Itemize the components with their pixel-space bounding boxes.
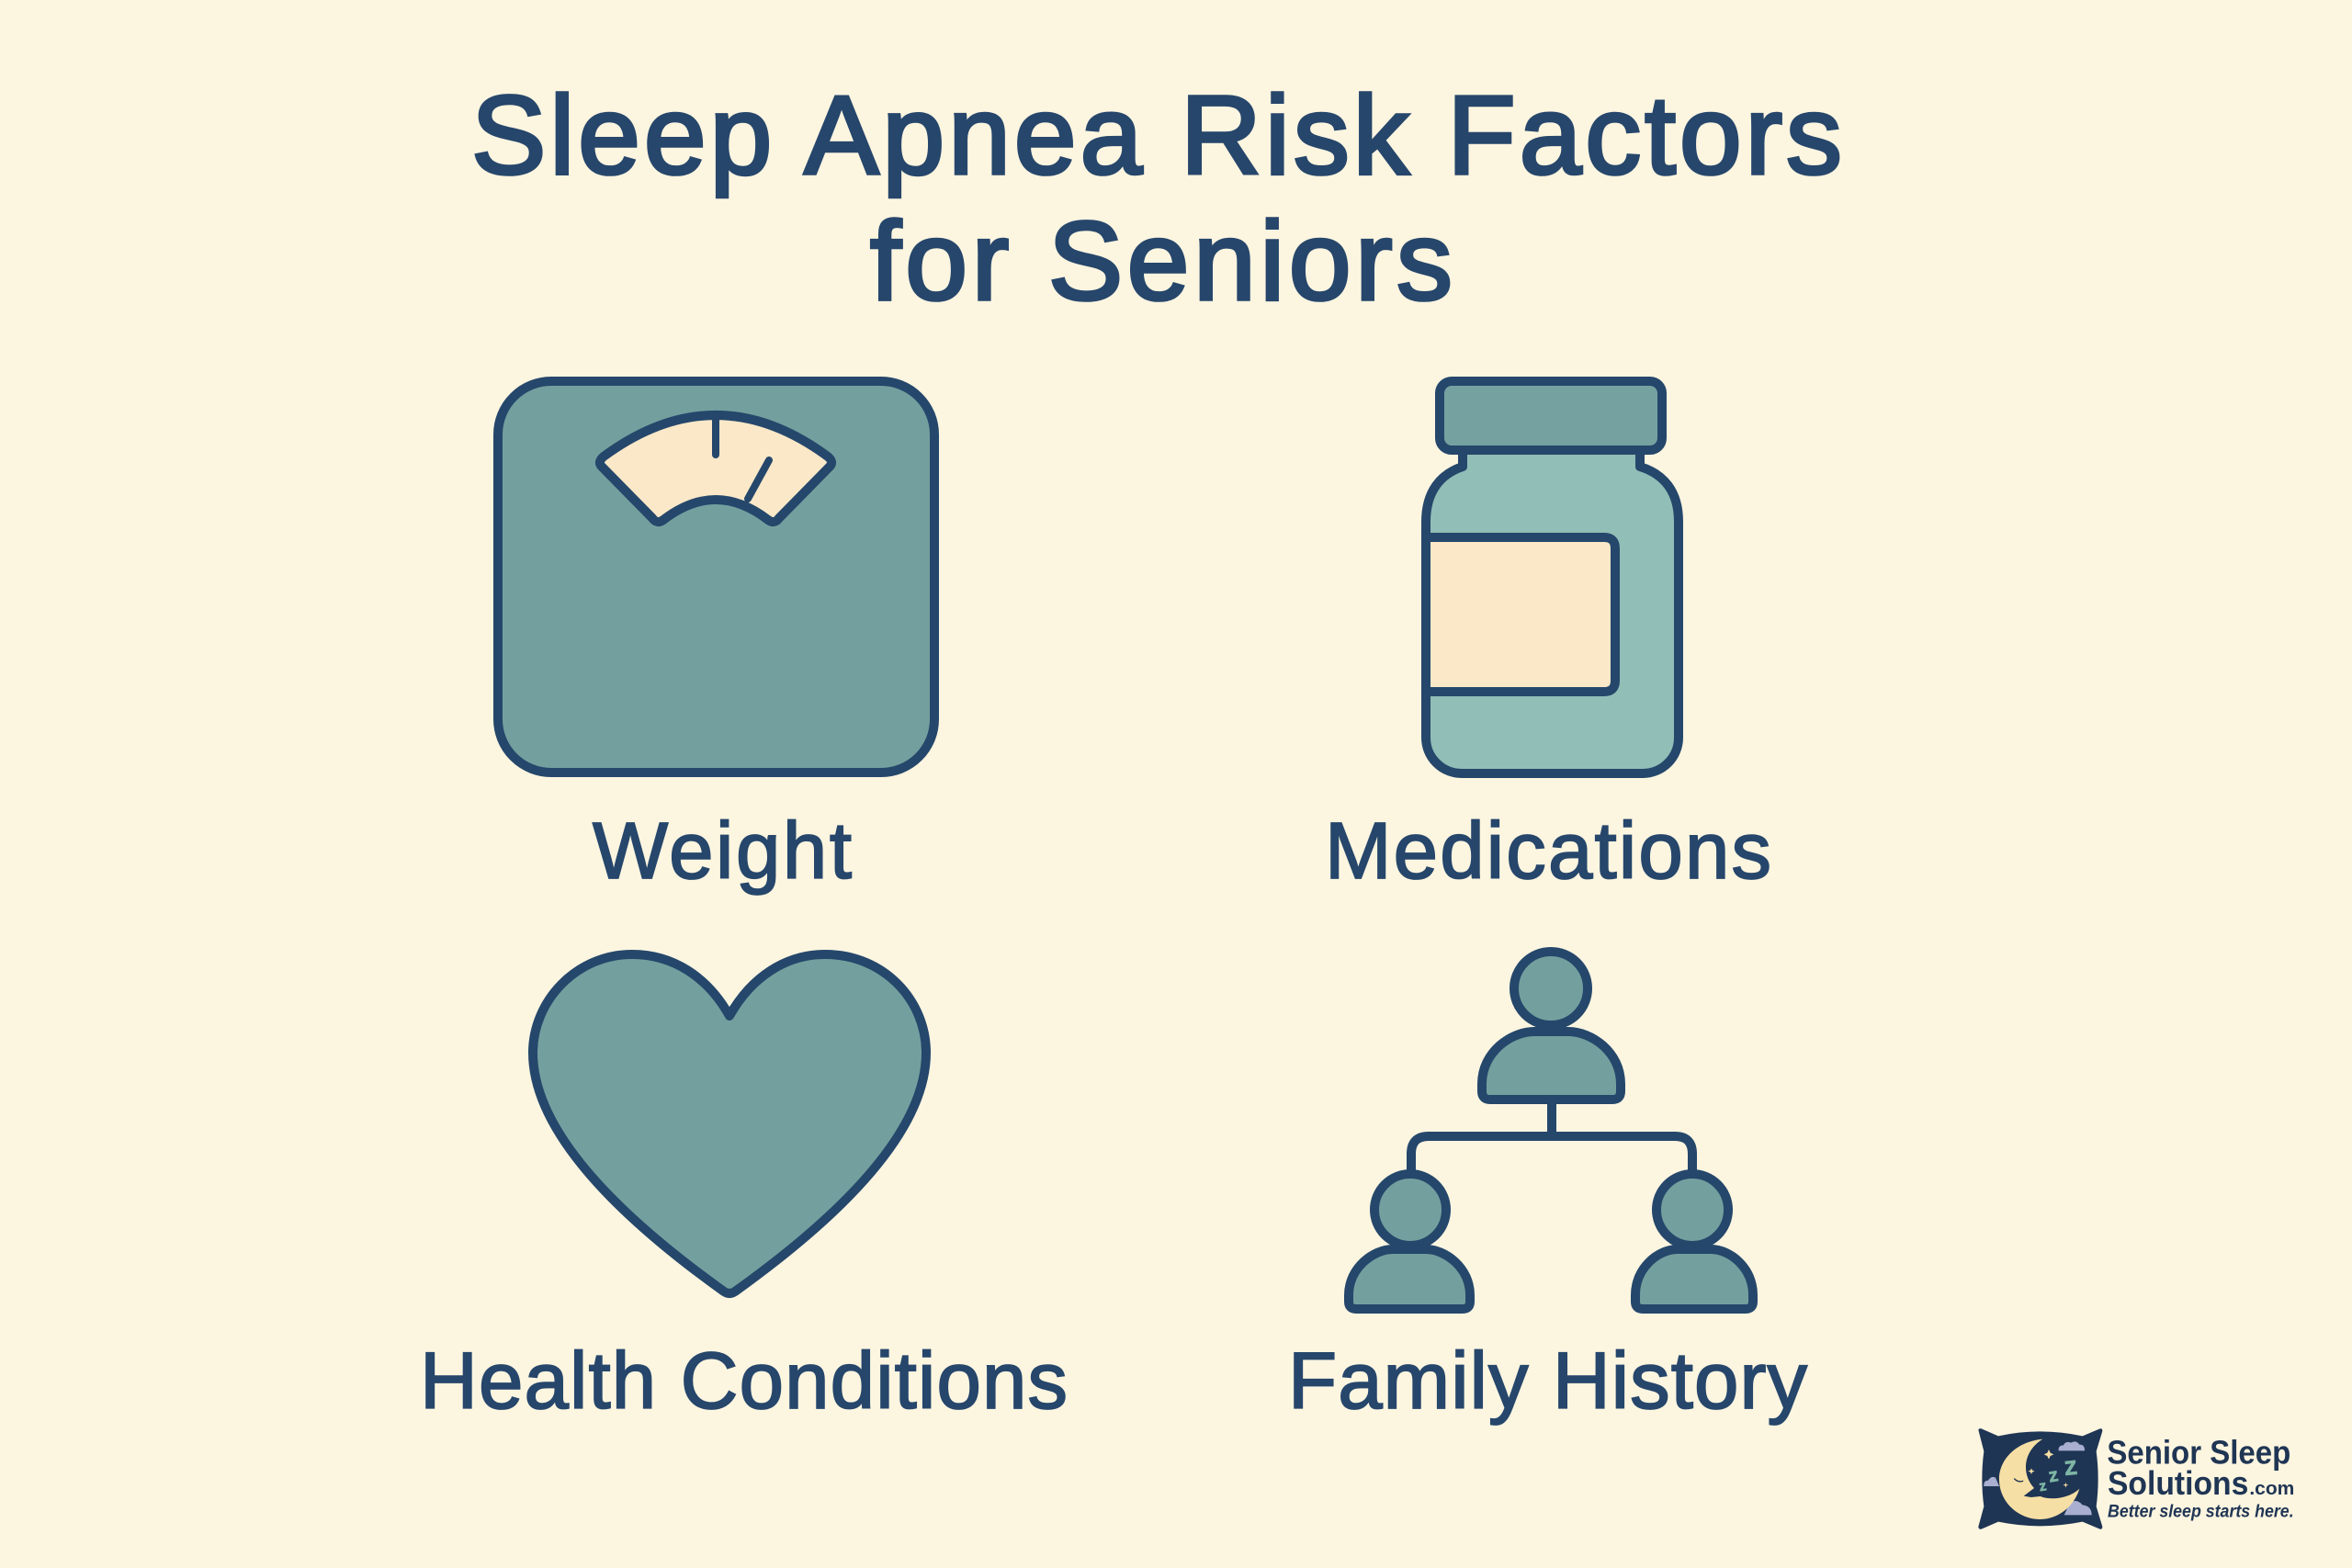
label: weight: Weight bbox=[593, 807, 852, 896]
label: health conditions: Health Conditions bbox=[420, 1337, 1068, 1426]
label: medications: Medications bbox=[1325, 807, 1771, 896]
icon: sleep letters: Z bbox=[2039, 1482, 2047, 1494]
icon: family tree bbox=[1349, 952, 1753, 1309]
panel: family history bbox=[1288, 952, 1808, 1426]
icon: stars bbox=[2028, 1450, 2068, 1488]
logo wordmark: .com bbox=[2249, 1478, 2294, 1499]
icon: closed eye bbox=[2015, 1479, 2023, 1482]
icon: crescent moon bbox=[1999, 1439, 2079, 1519]
logo wordmark: Senior Sleep bbox=[2107, 1433, 2290, 1471]
label: family history: Family History bbox=[1288, 1337, 1808, 1426]
icon: bathroom scale bbox=[498, 381, 934, 773]
logo wordmark: Better sleep starts here. bbox=[2108, 1503, 2294, 1522]
logo: Senior Sleep Solutions bbox=[1978, 1428, 2294, 1529]
icon: sleep letters: Z bbox=[2048, 1469, 2059, 1485]
title: for Seniors bbox=[870, 198, 1453, 323]
logo wordmark bbox=[2107, 1433, 2294, 1522]
icon: medicine bottle bbox=[1426, 381, 1679, 773]
icon: pillow bbox=[1978, 1428, 2102, 1529]
icon: clouds bbox=[1984, 1441, 2092, 1515]
icon: sleep letters: Z bbox=[2064, 1457, 2078, 1480]
panel: medications bbox=[1325, 381, 1771, 896]
panel: health conditions bbox=[420, 954, 1068, 1426]
logo wordmark: Solutions bbox=[2108, 1464, 2248, 1502]
icon: sleep letters bbox=[2039, 1457, 2078, 1494]
icon: heart bbox=[533, 954, 926, 1293]
title bbox=[471, 73, 1842, 323]
panel: weight bbox=[498, 381, 934, 896]
title: Sleep Apnea Risk Factors bbox=[471, 73, 1842, 197]
